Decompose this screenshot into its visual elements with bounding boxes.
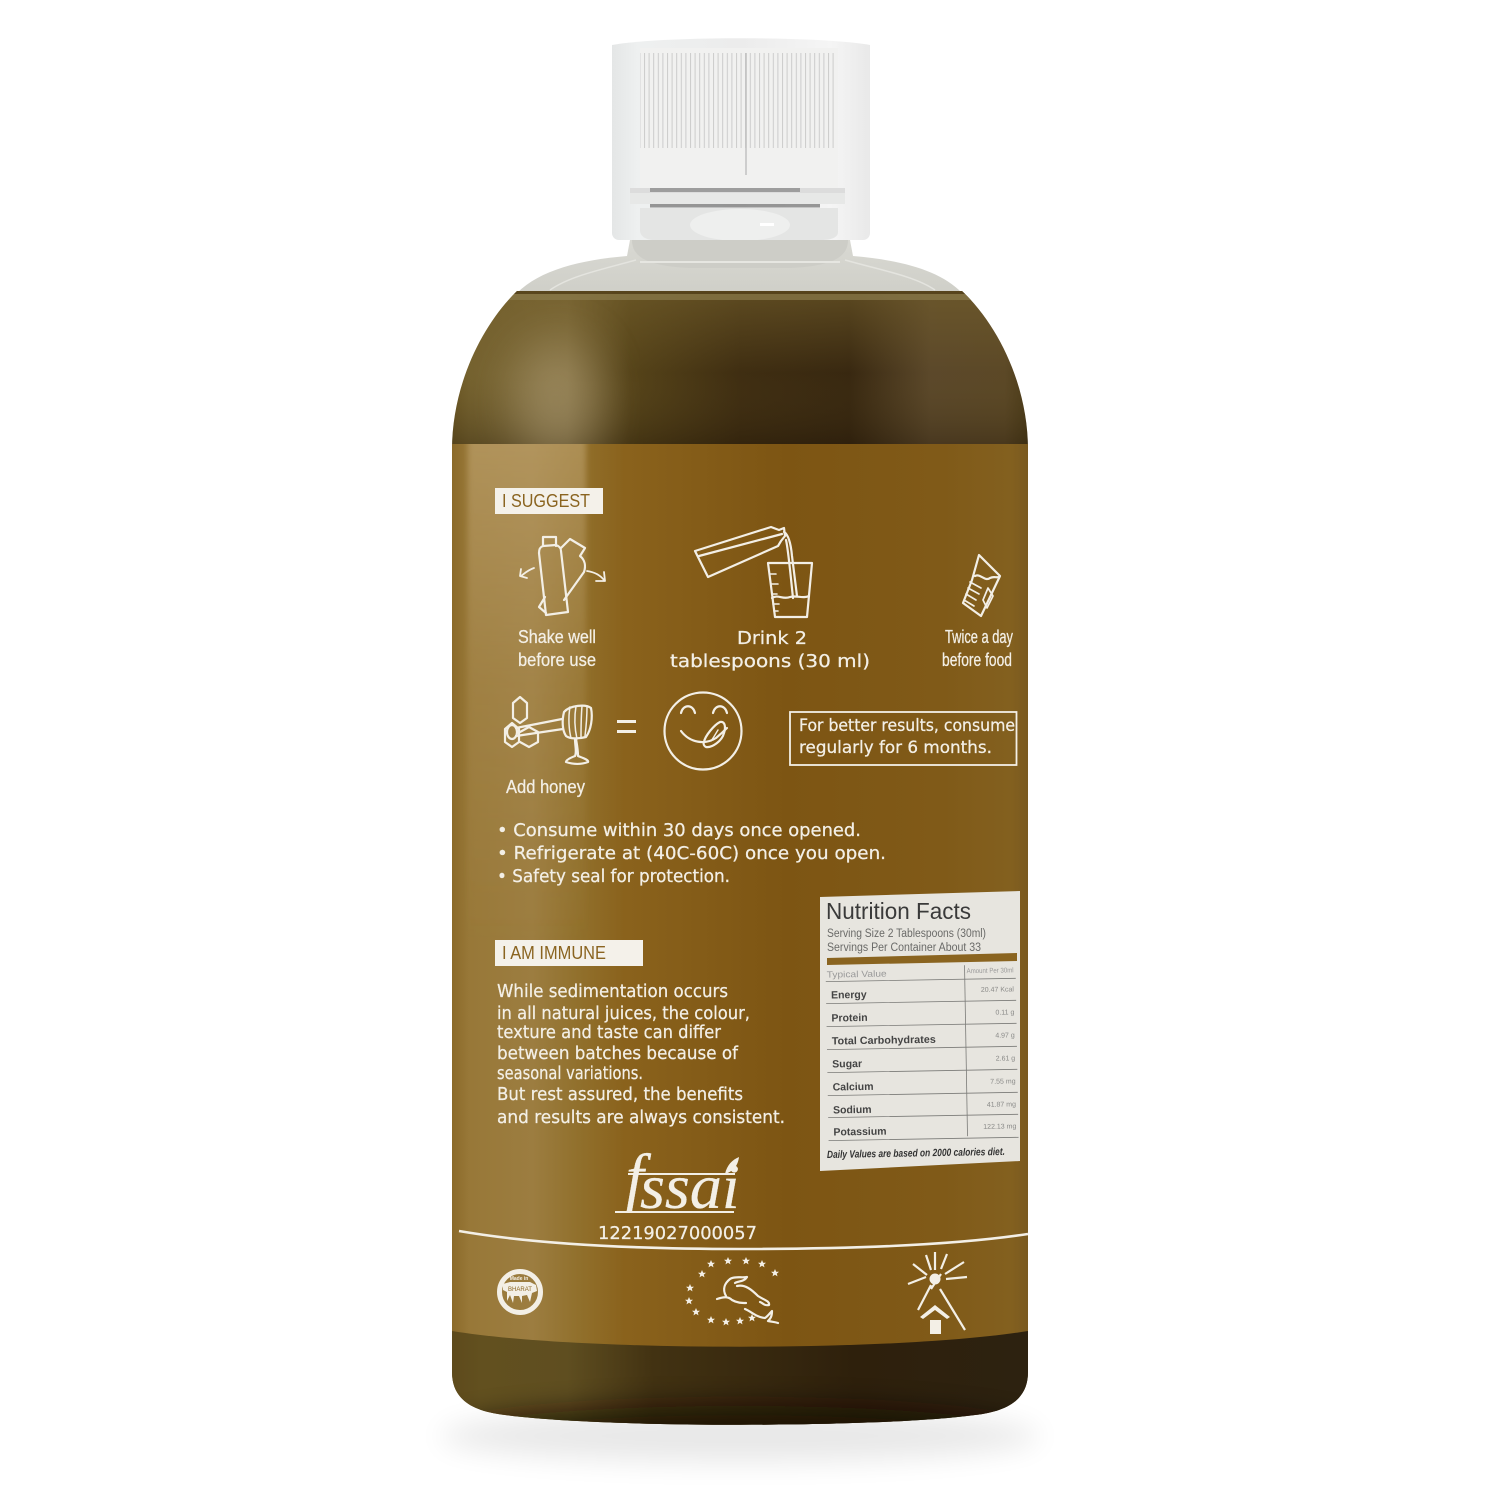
- nutrition table: 4.97 g: [995, 1032, 1015, 1040]
- text: add honey: Add honey: [506, 777, 585, 797]
- text block: sedimentation note: texture and taste can differ: [497, 1022, 722, 1043]
- cap ribbing: [640, 53, 835, 148]
- nutrition table: Potassium: [833, 1126, 887, 1139]
- text: twice a day: [942, 627, 1013, 670]
- nutrition table: 0.11 g: [995, 1009, 1015, 1017]
- icon: cruelty free rabbit with stars: [685, 1257, 779, 1325]
- heading: I suggest: I SUGGEST: [502, 491, 590, 511]
- nutrition table: Calcium: [833, 1081, 874, 1094]
- icon: sun and house: [908, 1252, 967, 1334]
- icon: juice pouch: [963, 555, 1000, 616]
- text block: sedimentation note: and results are always consistent.: [497, 1107, 785, 1128]
- usage bullet list: • Refrigerate at (40C-60C) once you open.: [497, 843, 886, 864]
- daily values footnote: Daily Values are based on 2000 calories diet.: [827, 1146, 1005, 1161]
- serving information: Serving Size 2 Tablespoons (30ml): [827, 928, 986, 940]
- text: drink 2 tablespoons: tablespoons (30 ml): [670, 651, 870, 672]
- ground shadow: [440, 1410, 1040, 1462]
- text: shake well: Shake well: [518, 627, 596, 647]
- text block: sedimentation note: seasonal variations.: [497, 1063, 643, 1084]
- nutrition table: Typical Value: [827, 969, 887, 980]
- text: shake well: before use: [518, 650, 596, 670]
- icon: made in Bharat badge: [500, 1272, 540, 1312]
- nutrition table: Sugar: [832, 1058, 862, 1071]
- callout: better results: regularly for 6 months.: [799, 738, 992, 757]
- heading: I am immune: I AM IMMUNE: [502, 943, 606, 963]
- label curved divider: [459, 1231, 1028, 1249]
- text block: sedimentation note: While sedimentation occurs: [497, 981, 728, 1002]
- icon: honey dipper and comb: [505, 697, 592, 764]
- icon: made in Bharat badge: Made in: [510, 1276, 528, 1282]
- logo: fssai: f: [626, 1141, 652, 1212]
- text: twice a day: Twice a day: [945, 627, 1013, 647]
- icon: equals sign: [617, 720, 636, 733]
- usage bullet list: [497, 820, 886, 887]
- text block: sedimentation note: [497, 981, 785, 1128]
- text block: sedimentation note: But rest assured, the benefits: [497, 1084, 743, 1105]
- text: drink 2 tablespoons: Drink 2: [737, 628, 807, 649]
- nutrition table: 7.55 mg: [990, 1078, 1016, 1086]
- logo: fssai: ssai: [640, 1151, 740, 1222]
- callout: better results: For better results, consume: [799, 716, 1015, 735]
- serving information: [827, 928, 986, 954]
- nutrition table: Protein: [831, 1012, 868, 1025]
- nutrition table: 41.87 mg: [987, 1101, 1016, 1109]
- serving information: Servings Per Container About 33: [827, 942, 981, 954]
- nutrition table: Total Carbohydrates: [832, 1034, 936, 1048]
- bottle infographic: [452, 38, 1028, 1466]
- text: drink 2 tablespoons: [670, 628, 870, 672]
- text: shake well: [518, 627, 596, 670]
- bottle cap: [612, 38, 870, 241]
- text: twice a day: before food: [942, 650, 1012, 670]
- product label background: [452, 420, 1028, 1354]
- heading: I am immune: [495, 940, 643, 966]
- text block: sedimentation note: in all natural juices, the colour,: [497, 1003, 750, 1024]
- icon: pour into measuring glass: [695, 527, 812, 617]
- panel: nutrition facts: [820, 891, 1020, 1171]
- icon: made in Bharat badge: BHARAT: [508, 1287, 532, 1293]
- nutrition table: Amount Per 30ml: [967, 967, 1014, 975]
- nutrition table: Energy: [831, 989, 867, 1002]
- text block: sedimentation note: between batches because of: [497, 1043, 739, 1064]
- usage bullet list: • Consume within 30 days once opened.: [497, 820, 861, 841]
- usage bullet list: • Safety seal for protection.: [497, 866, 730, 887]
- nutrition table: 20.47 Kcal: [981, 986, 1014, 994]
- nutrition heading: Nutrition Facts: [826, 898, 971, 924]
- nutrition divider bar: [827, 953, 1017, 965]
- icon: smiling face with tongue: [664, 692, 742, 770]
- nutrition table: Sodium: [833, 1104, 872, 1117]
- heading: I suggest: [495, 488, 603, 514]
- nutrition table: 2.61 g: [996, 1055, 1015, 1063]
- nutrition table: [826, 964, 1019, 1141]
- icon: shake bottle: [520, 537, 605, 615]
- nutrition table: 122.13 mg: [983, 1123, 1017, 1131]
- cap rings: [630, 188, 845, 208]
- bottle liquid body: [440, 285, 1040, 1466]
- cap seam shading: [745, 53, 747, 175]
- callout: better results: [790, 712, 1016, 765]
- licence number: 12219027000057: [598, 1224, 757, 1244]
- bottle glass shoulder and neck: [517, 240, 962, 293]
- clear neck seen through cap: [640, 208, 838, 240]
